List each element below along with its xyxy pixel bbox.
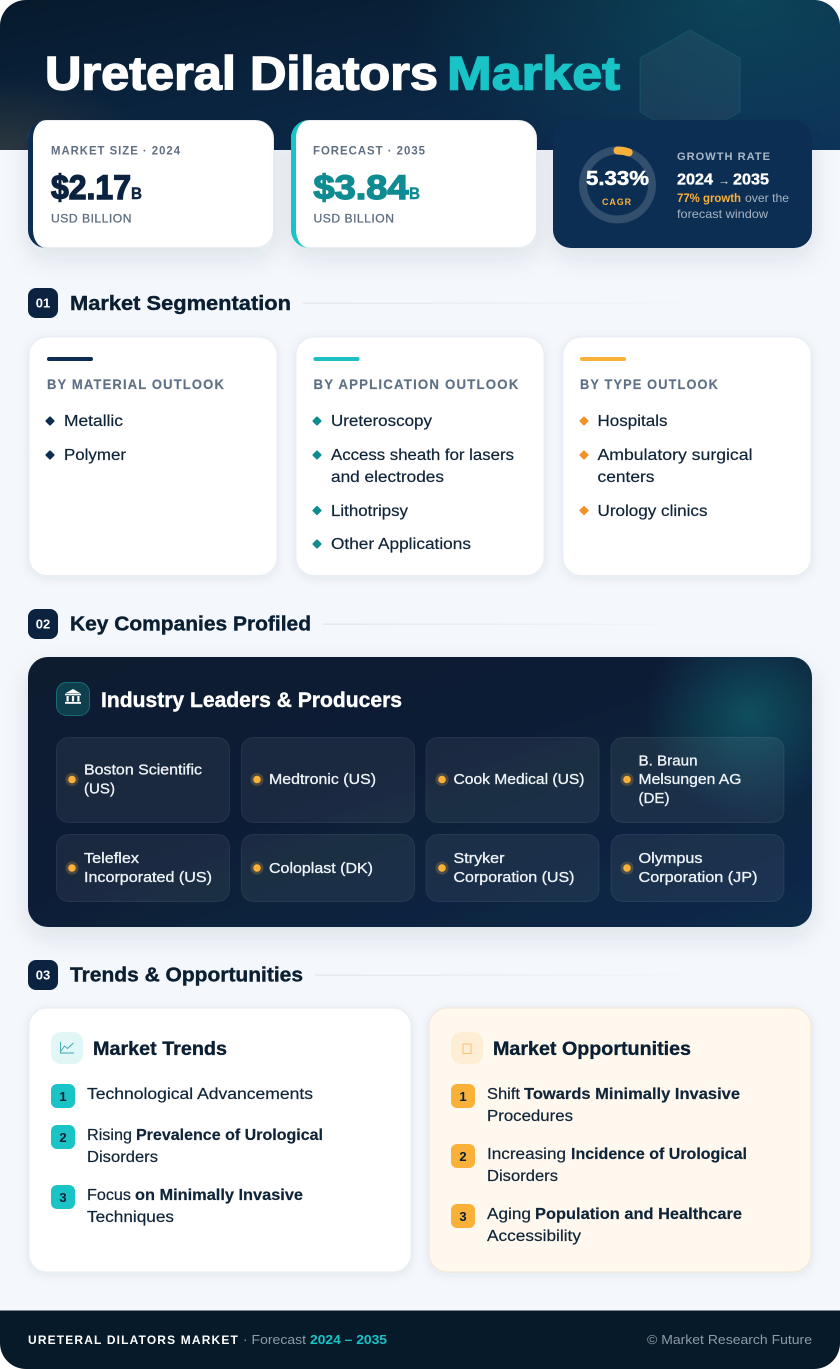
panel: by type outlook: Urology clinics — [598, 503, 708, 520]
trend 1: Technological Advancements — [87, 1086, 313, 1103]
section heading: 02 Key Companies Profiled — [28, 609, 528, 639]
company: B. Braun Melsungen — [611, 738, 784, 822]
company: Stryker: Stryker — [454, 851, 505, 867]
panel: by material outlook: Metallic — [64, 413, 123, 430]
footer: · Forecast — [243, 1333, 307, 1347]
section heading: 02 Key Companies Profiled: 02 — [36, 616, 50, 632]
title: Market — [447, 46, 620, 100]
panel: by application outlook — [296, 337, 544, 576]
panel: market opportunities — [429, 1008, 811, 1272]
company: Teleflex: Incorporated (US) — [84, 870, 212, 886]
company: Boston Scientific — [56, 738, 230, 822]
opportunity 2 — [451, 1144, 747, 1185]
company: Cook Medical: Cook Medical (US) — [454, 772, 584, 788]
panel: by application outlook: BY APPLICATION OUTLOOK — [314, 377, 520, 392]
company: B. Braun Melsungen: Melsungen AG — [638, 772, 742, 788]
header banner — [0, 0, 840, 150]
opportunity 1: Towards Minimally Invasive — [524, 1086, 740, 1103]
company: Boston Scientific: (US) — [84, 782, 115, 798]
panel: market trends — [29, 1008, 411, 1272]
trend 2: 2 — [59, 1130, 67, 1145]
footer: © Market Research Future — [647, 1333, 812, 1347]
panel: by type outlook: Ambulatory surgical — [598, 447, 752, 464]
footer: 2024 – 2035 — [310, 1333, 387, 1347]
stat card: CAGR growth rate: 77% growth — [677, 191, 741, 205]
company: Teleflex — [56, 834, 230, 902]
stat card: CAGR growth rate: 2035 — [733, 172, 769, 188]
stat card: CAGR growth rate: → — [718, 174, 730, 188]
footer: URETERAL DILATORS MARKET — [28, 1333, 239, 1347]
section heading: 02 Key Companies Profiled: Key Companies Profiled — [70, 612, 311, 636]
panel: by material outlook — [29, 337, 277, 576]
trend 3 — [51, 1185, 303, 1226]
opportunity 3: 3 — [459, 1209, 467, 1224]
chart: CAGR ring: CAGR — [602, 197, 632, 208]
trend 3: 3 — [59, 1190, 67, 1205]
panel: industry leaders and producers — [22, 657, 818, 942]
section heading: 01 Market Segmentation — [28, 288, 516, 318]
panel: by material outlook: Polymer — [64, 447, 126, 464]
company: Stryker — [426, 834, 599, 902]
company: B. Braun Melsungen: B. Braun — [638, 754, 698, 770]
trend 2: Rising — [87, 1127, 132, 1144]
trend 3: Focus — [87, 1187, 131, 1204]
company: Coloplast — [242, 834, 414, 902]
stat card: CAGR growth rate: GROWTH RATE — [677, 151, 771, 163]
panel: by application outlook: Ureteroscopy — [331, 413, 432, 430]
stat card: market size 2024: B — [131, 184, 142, 203]
panel: by material outlook: BY MATERIAL OUTLOOK — [47, 377, 225, 392]
trend 2 — [51, 1125, 323, 1166]
opportunity 2: 2 — [459, 1149, 467, 1164]
icon: hexagon watermark — [640, 30, 740, 120]
chart: CAGR ring — [583, 150, 652, 220]
panel: by application outlook: Lithotripsy — [331, 503, 408, 520]
chart: CAGR ring: 5.33% — [586, 167, 649, 190]
stat card: CAGR growth rate: 2024 — [677, 172, 713, 188]
stat card: forecast 2035: USD BILLION — [314, 212, 394, 226]
trend 3: Techniques — [87, 1209, 174, 1226]
stat card: forecast 2035: FORECAST · 2035 — [313, 146, 426, 158]
trend 1 — [51, 1084, 313, 1108]
opportunity 1 — [451, 1084, 740, 1125]
opportunity 1: 1 — [459, 1089, 467, 1104]
panel: by type outlook: BY TYPE OUTLOOK — [580, 377, 719, 392]
panel: by application outlook: Access sheath for lasers — [331, 447, 514, 464]
stat card: forecast 2035: $3.84 — [314, 169, 409, 207]
title: Ureteral Dilators — [45, 46, 438, 100]
company: Olympus — [611, 834, 784, 902]
title — [47, 54, 620, 91]
company: Coloplast: Coloplast (DK) — [269, 861, 373, 877]
trend 1: 1 — [59, 1089, 67, 1104]
panel: by application outlook: Other Applications — [331, 536, 471, 553]
icon: line chart — [51, 1032, 83, 1064]
stat card: CAGR growth rate: over the — [745, 191, 789, 205]
stat card: market size 2024: $2.17 — [51, 169, 131, 207]
company: Stryker: Corporation (US) — [454, 870, 574, 886]
section heading: 03 Trends and Opportunities: 03 — [36, 968, 50, 982]
panel: market trends: Market Trends — [93, 1039, 227, 1060]
opportunity 3: Accessibility — [487, 1228, 581, 1245]
stat card: market size 2024: USD BILLION — [51, 212, 132, 226]
opportunity 3: Aging — [487, 1206, 531, 1223]
opportunity 2: Increasing — [487, 1146, 566, 1163]
opportunity 1: Shift — [487, 1086, 521, 1103]
icon: institution building — [56, 682, 90, 716]
stat card: forecast 2035: B — [409, 184, 420, 203]
footer — [0, 1310, 840, 1369]
section heading: 03 Trends and Opportunities: Trends & Opportunities — [70, 964, 303, 986]
stat card: forecast 2035 — [291, 120, 536, 248]
panel: industry leaders and producers: Industry Leaders & Producers — [101, 689, 402, 712]
company: Olympus: Olympus — [638, 851, 702, 867]
section heading: 03 Trends and Opportunities — [28, 960, 524, 990]
stat card: CAGR growth rate — [553, 120, 812, 248]
opportunity 2: Disorders — [487, 1168, 558, 1185]
company: Medtronic — [242, 738, 414, 822]
panel: market opportunities: Market Opportunities — [493, 1039, 691, 1060]
company: Teleflex: Teleflex — [84, 851, 140, 867]
opportunity 2: Incidence of Urological — [571, 1146, 747, 1163]
company: Boston Scientific: Boston Scientific — [84, 762, 202, 778]
icon: missing glyph box — [451, 1032, 483, 1064]
trend 2: Prevalence of Urological — [136, 1127, 323, 1144]
panel: by application outlook: and electrodes — [331, 469, 444, 486]
opportunity 1: Procedures — [487, 1108, 573, 1125]
panel: by type outlook — [563, 337, 811, 576]
stat card: market size 2024: MARKET SIZE · 2024 — [51, 146, 181, 158]
stat card: market size 2024 — [28, 120, 274, 248]
stat card: CAGR growth rate: forecast window — [677, 207, 768, 221]
opportunity 3 — [451, 1204, 742, 1245]
trend 3: on Minimally Invasive — [135, 1187, 303, 1204]
section heading: 01 Market Segmentation: 01 — [36, 296, 50, 310]
opportunity 3: Population and Healthcare — [535, 1206, 742, 1223]
company: Medtronic: Medtronic (US) — [269, 772, 376, 788]
panel: by type outlook: centers — [598, 469, 655, 486]
company: Olympus: Corporation (JP) — [638, 870, 758, 886]
trend 2: Disorders — [87, 1149, 158, 1166]
company: Cook Medical — [426, 738, 599, 822]
company: B. Braun Melsungen: (DE) — [638, 791, 670, 807]
section heading: 01 Market Segmentation: Market Segmentation — [70, 292, 291, 315]
panel: by type outlook: Hospitals — [598, 413, 668, 430]
